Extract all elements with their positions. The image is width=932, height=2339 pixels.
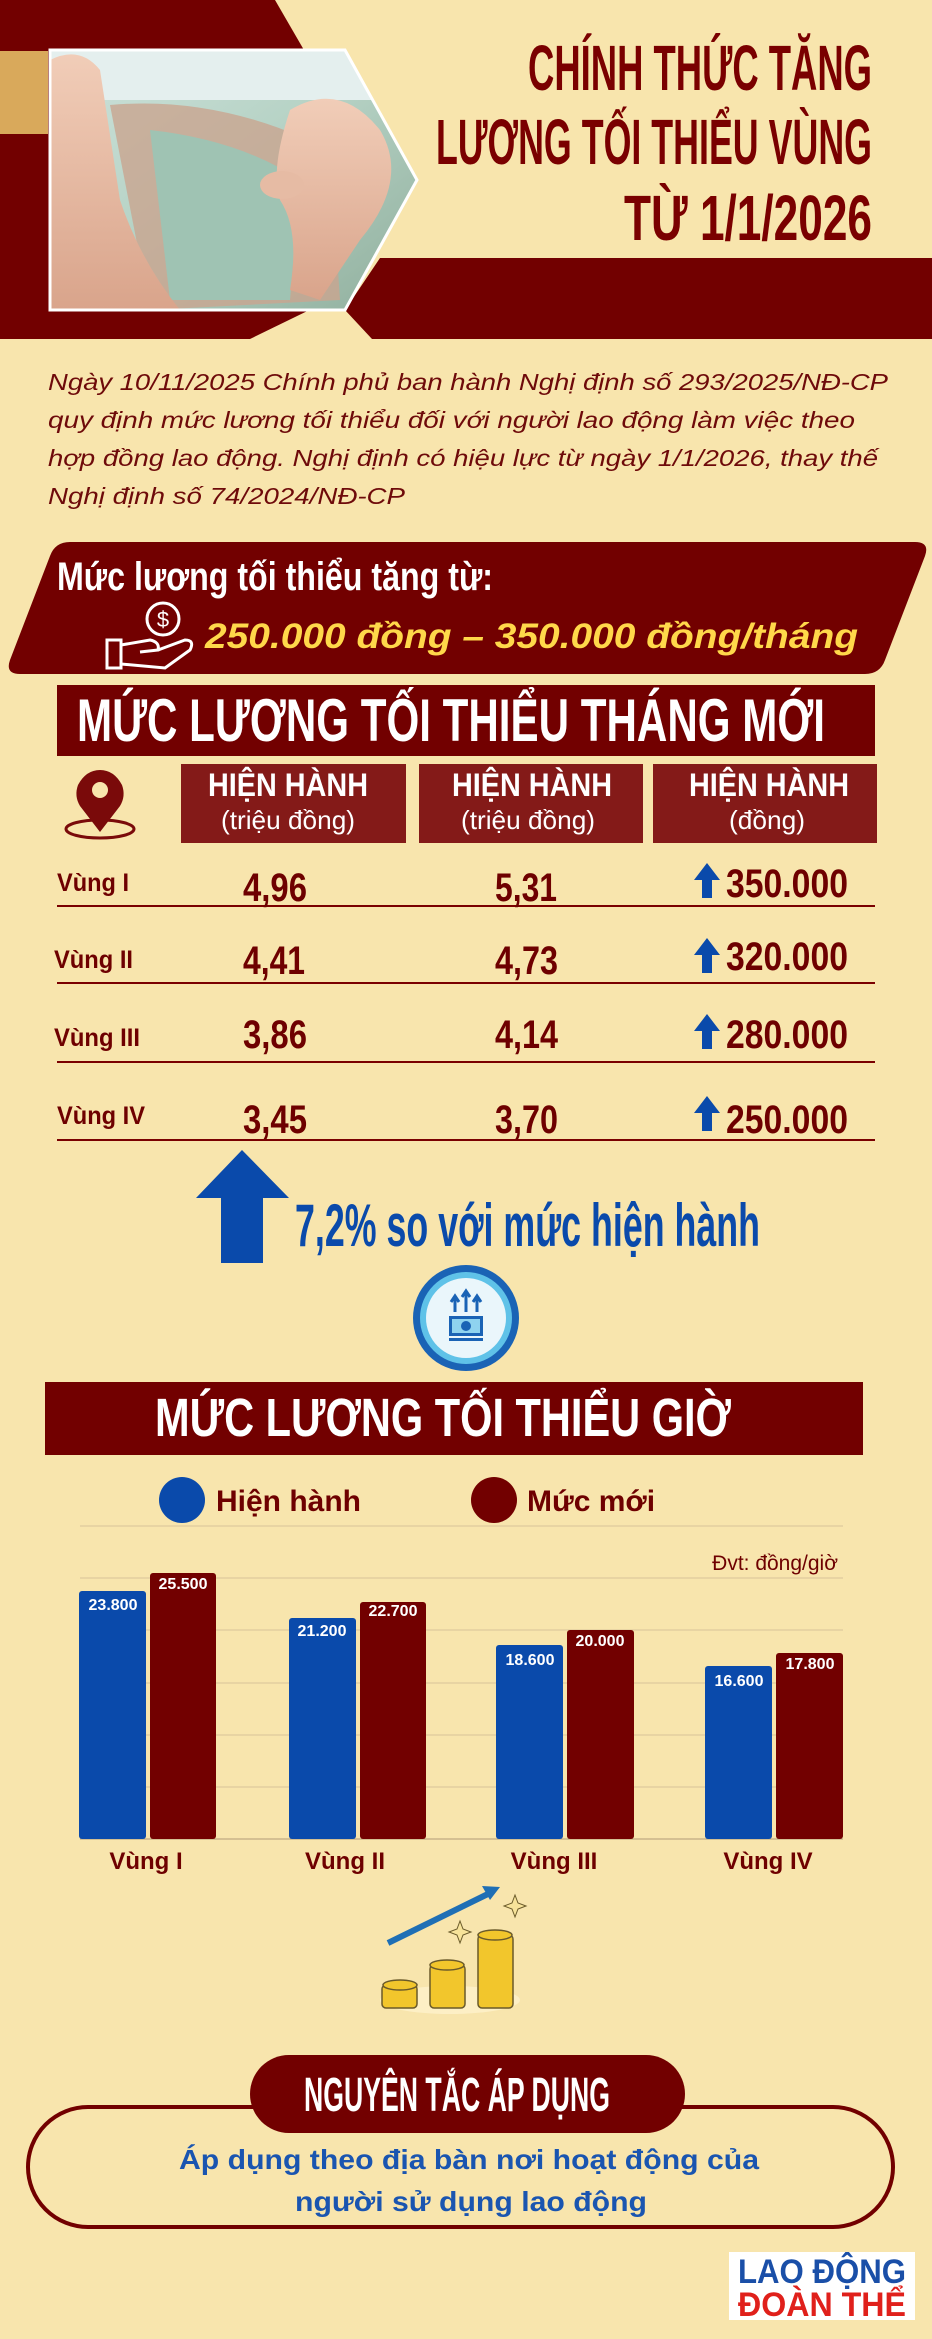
- table rows: 4,96: [243, 866, 307, 910]
- bar chart: hourly wage: 21.200: [298, 1623, 347, 1640]
- table rows: 350.000: [726, 862, 848, 906]
- bar chart: hourly wage: 20.000: [576, 1633, 625, 1650]
- banner: increase range: [9, 542, 926, 674]
- banner: increase range: Mức lương tối thiểu tăng từ:: [57, 555, 493, 599]
- table header cells: HIỆN HÀNH: [452, 767, 612, 803]
- title: [436, 32, 872, 254]
- table rows: 5,31: [495, 866, 557, 910]
- bar chart: hourly wage: Vùng IV: [723, 1848, 813, 1875]
- icon: money increase circle: [413, 1265, 519, 1371]
- table rows: 3,86: [243, 1013, 307, 1057]
- photo: hands counting money: [50, 50, 420, 312]
- table rows: Vùng III: [54, 1024, 140, 1052]
- bar chart: hourly wage: 23.800: [89, 1597, 138, 1614]
- table header cells: HIỆN HÀNH: [689, 767, 849, 803]
- header background shapes: [0, 0, 932, 339]
- table header cells: [181, 764, 877, 843]
- bar chart: hourly wage: [79, 1526, 843, 1875]
- bar chart: hourly wage: Vùng III: [511, 1848, 597, 1875]
- bar chart: hourly wage: Vùng I: [109, 1848, 183, 1875]
- icon: coin stacks with rising arrow: [380, 1886, 526, 2014]
- intro paragraph: hợp đồng lao động. Nghị định có hiệu lực từ ngày 1/1/2026, thay thế: [48, 445, 881, 471]
- logo: Lao Động Đoàn Thể: ĐOÀN THỂ: [738, 2286, 906, 2324]
- table rows: [54, 862, 875, 1142]
- section title: hourly minimum wage: MỨC LƯƠNG TỐI THIỂU GIỜ: [155, 1388, 731, 1448]
- intro paragraph: Ngày 10/11/2025 Chính phủ ban hành Nghị định số 293/2025/NĐ-CP: [48, 369, 889, 395]
- intro paragraph: quy định mức lương tối thiểu đối với người lao động làm việc theo: [48, 407, 855, 433]
- table rows: 250.000: [726, 1098, 848, 1142]
- callout: application principle: Áp dụng theo địa bàn nơi hoạt động của: [179, 2144, 759, 2175]
- legend: Mức mới: [527, 1485, 655, 1518]
- bar chart: hourly wage: Vùng II: [305, 1848, 385, 1875]
- intro paragraph: [48, 369, 889, 509]
- intro paragraph: Nghị định số 74/2024/NĐ-CP: [48, 483, 406, 509]
- section title: hourly minimum wage: [45, 1382, 863, 1455]
- banner: increase range: 250.000 đồng – 350.000 đồng/tháng: [204, 617, 858, 656]
- bar chart: hourly wage: 18.600: [506, 1652, 555, 1669]
- table rows: Vùng IV: [57, 1102, 145, 1130]
- icon: hand with coin: $: [157, 607, 169, 632]
- table header cells: HIỆN HÀNH: [208, 767, 368, 803]
- bar chart: hourly wage: 16.600: [715, 1673, 764, 1690]
- callout: application principle: người sử dụng lao động: [295, 2186, 647, 2217]
- table rows: 4,41: [243, 939, 305, 983]
- table rows: Vùng II: [54, 946, 133, 974]
- legend: [159, 1477, 655, 1523]
- table header cells: (đồng): [729, 805, 805, 835]
- icon: hand with coin: [107, 603, 192, 668]
- logo: Lao Động Đoàn Thể: LAO ĐỘNG: [738, 2252, 906, 2291]
- icon: location pin: [66, 770, 134, 838]
- bar chart: hourly wage: 25.500: [159, 1576, 208, 1593]
- table header cells: (triệu đồng): [221, 805, 355, 835]
- table rows: 3,70: [495, 1098, 558, 1142]
- bar chart: hourly wage: Đvt: đồng/giờ: [712, 1552, 838, 1575]
- bar chart: hourly wage: 17.800: [786, 1656, 835, 1673]
- table rows: 4,14: [495, 1013, 559, 1057]
- big arrow: 7.2% increase: [196, 1150, 760, 1263]
- table rows: Vùng I: [57, 869, 129, 897]
- table header cells: (triệu đồng): [461, 805, 595, 835]
- table rows: 4,73: [495, 939, 558, 983]
- table rows: 280.000: [726, 1013, 848, 1057]
- legend: Hiện hành: [216, 1485, 361, 1518]
- callout: application principle: [28, 2055, 893, 2227]
- table rows: 3,45: [243, 1098, 307, 1142]
- table rows: 320.000: [726, 935, 848, 979]
- callout: application principle: NGUYÊN TẮC ÁP DỤNG: [304, 2067, 610, 2122]
- logo: Lao Động Đoàn Thể: [729, 2252, 915, 2324]
- bar chart: hourly wage: 22.700: [369, 1603, 418, 1620]
